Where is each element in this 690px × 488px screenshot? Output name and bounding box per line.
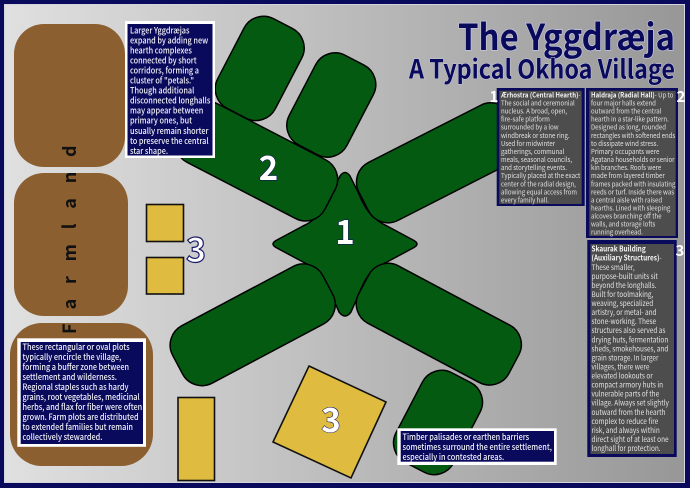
- title: The Yggdræja: [458, 9, 675, 61]
- callout: farm plots: typically encircle the village,: [22, 351, 121, 363]
- callout: larger Yggdraejas: primary ones, but: [130, 115, 192, 127]
- panel: Aerhostra central hearth: meals, seasonal councils,: [501, 154, 572, 164]
- panel: Skaurak auxiliary structures: complex to reduce fire: [592, 416, 658, 427]
- panel: Haldraja radial hall: running overhead.: [591, 226, 643, 237]
- callout: timber palisades: sometimes surround the entire settlement,: [402, 441, 552, 453]
- callout: larger Yggdraejas: expand by adding new: [130, 35, 209, 47]
- panel: Skaurak auxiliary structures: [587, 240, 677, 457]
- panel: Skaurak auxiliary structures: longhall for protection.: [592, 443, 661, 454]
- panel: Haldraja radial hall: [586, 88, 678, 238]
- panel: Skaurak auxiliary structures: purpose-built units sit: [592, 271, 658, 282]
- number 3 beside small buildings: 3: [186, 223, 206, 272]
- panel: Aerhostra central hearth: surrounded by a low: [501, 121, 559, 132]
- callout: timber palisades: [397, 428, 557, 465]
- panel: Skaurak auxiliary structures: These smaller,: [592, 262, 635, 273]
- panel: Haldraja radial hall: - Up to: [655, 89, 674, 100]
- panel: Skaurak auxiliary structures: Skaurak Building: [592, 244, 646, 255]
- number 2 on longhall: 2: [259, 142, 278, 190]
- panel: Skaurak auxiliary structures: direct sight of at least one: [592, 434, 669, 445]
- callout: larger Yggdraejas: usually remain shorter: [130, 125, 209, 137]
- number 1 on star: 1: [335, 206, 355, 254]
- panel: Aerhostra central hearth: fire-safe platform: [501, 113, 550, 124]
- callout: larger Yggdraejas: [125, 21, 215, 158]
- panel: Haldraja radial hall: four major halls extend: [591, 97, 656, 108]
- panel tag: 3: 3: [676, 240, 684, 261]
- vertical label: Farmland: Farmland: [56, 131, 82, 334]
- panel: Haldraja radial hall: walls, and storage lofts: [591, 218, 655, 229]
- panel: Skaurak auxiliary structures: artistry, or metal- and: [592, 308, 657, 318]
- callout: farm plots: forming a buffer zone between: [22, 361, 129, 373]
- longhall: lower petal: [386, 363, 490, 482]
- auxiliary building: rotated square: [273, 366, 386, 478]
- star: central hearth: [273, 172, 417, 316]
- longhall: upper petal right: [279, 45, 383, 165]
- panel: Haldraja radial hall: reeds or turf. Inside there was: [591, 186, 674, 196]
- callout: larger Yggdraejas: cluster of "petals.": [130, 75, 194, 87]
- panel: Aerhostra central hearth: allowing equal access from: [501, 186, 577, 196]
- farm plot: middle: [14, 173, 128, 316]
- longhall: radial upper right: [349, 95, 530, 230]
- callout: farm plots: grown. Farm plots are distributed: [22, 411, 139, 423]
- callout: farm plots: to extended families but remain: [22, 421, 133, 433]
- callout: larger Yggdraejas: Larger Yggdræjas: [130, 25, 190, 37]
- panel: Skaurak auxiliary structures: beyond the longhalls.: [592, 280, 656, 291]
- longhall: upper petal left: [208, 9, 312, 128]
- panel: Haldraja radial hall: Haldraja (Radial Hall): [591, 89, 655, 100]
- panel: Skaurak auxiliary structures: drying huts, fermentation: [592, 335, 668, 346]
- panel: Skaurak auxiliary structures: villages, there were: [592, 362, 650, 373]
- panel: Haldraja radial hall: kin branches. Roofs were: [591, 162, 662, 172]
- callout: larger Yggdraejas: connected by short: [130, 55, 197, 67]
- panel: Haldraja radial hall: Designed as long, rounded: [591, 121, 666, 132]
- panel: Haldraja radial hall: a central aisle with raised: [591, 194, 662, 205]
- panel: Aerhostra central hearth: windbreak or stone ring.: [501, 129, 570, 140]
- panel: Haldraja radial hall: hearth in a star-like pattern.: [591, 113, 669, 124]
- callout: larger Yggdraejas: may appear between: [130, 105, 203, 117]
- panel: Haldraja radial hall: to dissipate wind stress.: [591, 137, 658, 148]
- panel: Skaurak auxiliary structures: elevated lookouts or: [592, 371, 653, 382]
- longhall: radial upper left: [168, 94, 345, 229]
- panel: Aerhostra central hearth: -: [578, 89, 580, 100]
- panel: Skaurak auxiliary structures: outward from the hearth: [592, 407, 666, 418]
- callout: larger Yggdraejas: Though additional: [130, 85, 195, 97]
- panel: Aerhostra central hearth: Typically placed at the exact: [501, 170, 581, 180]
- panel: Haldraja radial hall: rectangles with softened ends: [591, 129, 675, 140]
- panel: Skaurak auxiliary structures: grain storage. In larger: [592, 353, 659, 364]
- auxiliary building: tall rectangle: [178, 398, 214, 480]
- panel: Aerhostra central hearth: center of the radial design,: [501, 178, 576, 188]
- auxiliary building: small square upper: [146, 204, 184, 242]
- callout: farm plots: [17, 338, 146, 447]
- panel: Skaurak auxiliary structures: weaving, specialized: [592, 299, 653, 309]
- panel tag: 2: 2: [676, 86, 686, 107]
- panel: Haldraja radial hall: frames packed with insulating: [591, 178, 676, 188]
- panel: Skaurak auxiliary structures: stone-working. These: [592, 317, 656, 327]
- panel: Skaurak auxiliary structures: -: [659, 253, 662, 264]
- panel: Aerhostra central hearth: [497, 88, 585, 206]
- callout: larger Yggdraejas: to preserve the central: [130, 135, 209, 147]
- callout: larger Yggdraejas: disconnected longhalls: [130, 95, 211, 107]
- panel: Skaurak auxiliary structures: sheds, smokehouses, and: [592, 344, 668, 355]
- panel: Skaurak auxiliary structures: (Auxiliary Structures): [592, 253, 660, 264]
- callout: farm plots: collectively stewarded.: [22, 431, 102, 443]
- longhall: radial lower right: [348, 256, 529, 393]
- panel: Aerhostra central hearth: nucleus. A broad, open,: [501, 105, 567, 116]
- callout: farm plots: Regional staples such as hardy: [22, 381, 129, 393]
- farm plot: upper: [14, 24, 125, 167]
- panel: Aerhostra central hearth: The social and ceremonial: [501, 97, 575, 108]
- panel: Aerhostra central hearth: and storytelling events.: [501, 162, 567, 172]
- callout: farm plots: grains, root vegetables, medicinal: [22, 391, 140, 403]
- farm plot: lower: [10, 323, 153, 466]
- callout: farm plots: These rectangular or oval plots: [22, 341, 130, 353]
- panel: Aerhostra central hearth: every family hall.: [501, 194, 549, 205]
- panel: Haldraja radial hall: Primary occupants were: [591, 145, 660, 156]
- panel: Haldraja radial hall: outward from the central: [591, 105, 662, 116]
- panel: Skaurak auxiliary structures: structures also served as: [592, 326, 666, 336]
- panel: Skaurak auxiliary structures: Built for toolmaking,: [592, 289, 653, 300]
- panel: Skaurak auxiliary structures: compact armory huts in: [592, 380, 663, 391]
- panel: Haldraja radial hall: hearths. Lined with sleeping: [591, 202, 671, 213]
- panel: Aerhostra central hearth: gatherings, communal: [501, 145, 564, 156]
- panel: Skaurak auxiliary structures: vulnerable parts of the: [592, 389, 659, 400]
- longhall: radial lower left: [162, 256, 343, 393]
- panel: Aerhostra central hearth: Ærhostra (Central Hearth): [500, 89, 578, 100]
- callout: larger Yggdraejas: hearth complexes: [130, 45, 192, 57]
- panel: Haldraja radial hall: made from layered timber: [591, 170, 665, 180]
- panel: Skaurak auxiliary structures: village. Always set slightly: [592, 398, 669, 409]
- callout: larger Yggdraejas: star shape.: [130, 145, 168, 157]
- panel tag: 1: 1: [490, 86, 498, 107]
- callout: farm plots: herbs, and flax for fiber were often: [22, 401, 142, 413]
- auxiliary building: small square lower: [146, 258, 184, 294]
- callout: farm plots: settlement and wilderness.: [22, 371, 117, 383]
- callout: larger Yggdraejas: corridors, forming a: [130, 65, 199, 77]
- panel: Haldraja radial hall: alcoves branching off the: [591, 210, 662, 221]
- title: [408, 9, 675, 86]
- panel: Skaurak auxiliary structures: risk, and always within: [592, 425, 660, 436]
- callout: timber palisades: Timber palisades or earthen barriers: [402, 431, 529, 443]
- number 3 on rotated building: 3: [321, 394, 341, 442]
- callout: timber palisades: especially in contested areas.: [402, 451, 504, 463]
- panel: Haldraja radial hall: Agatana households or senior: [591, 154, 675, 164]
- panel: Aerhostra central hearth: Used for midwinter: [501, 137, 556, 148]
